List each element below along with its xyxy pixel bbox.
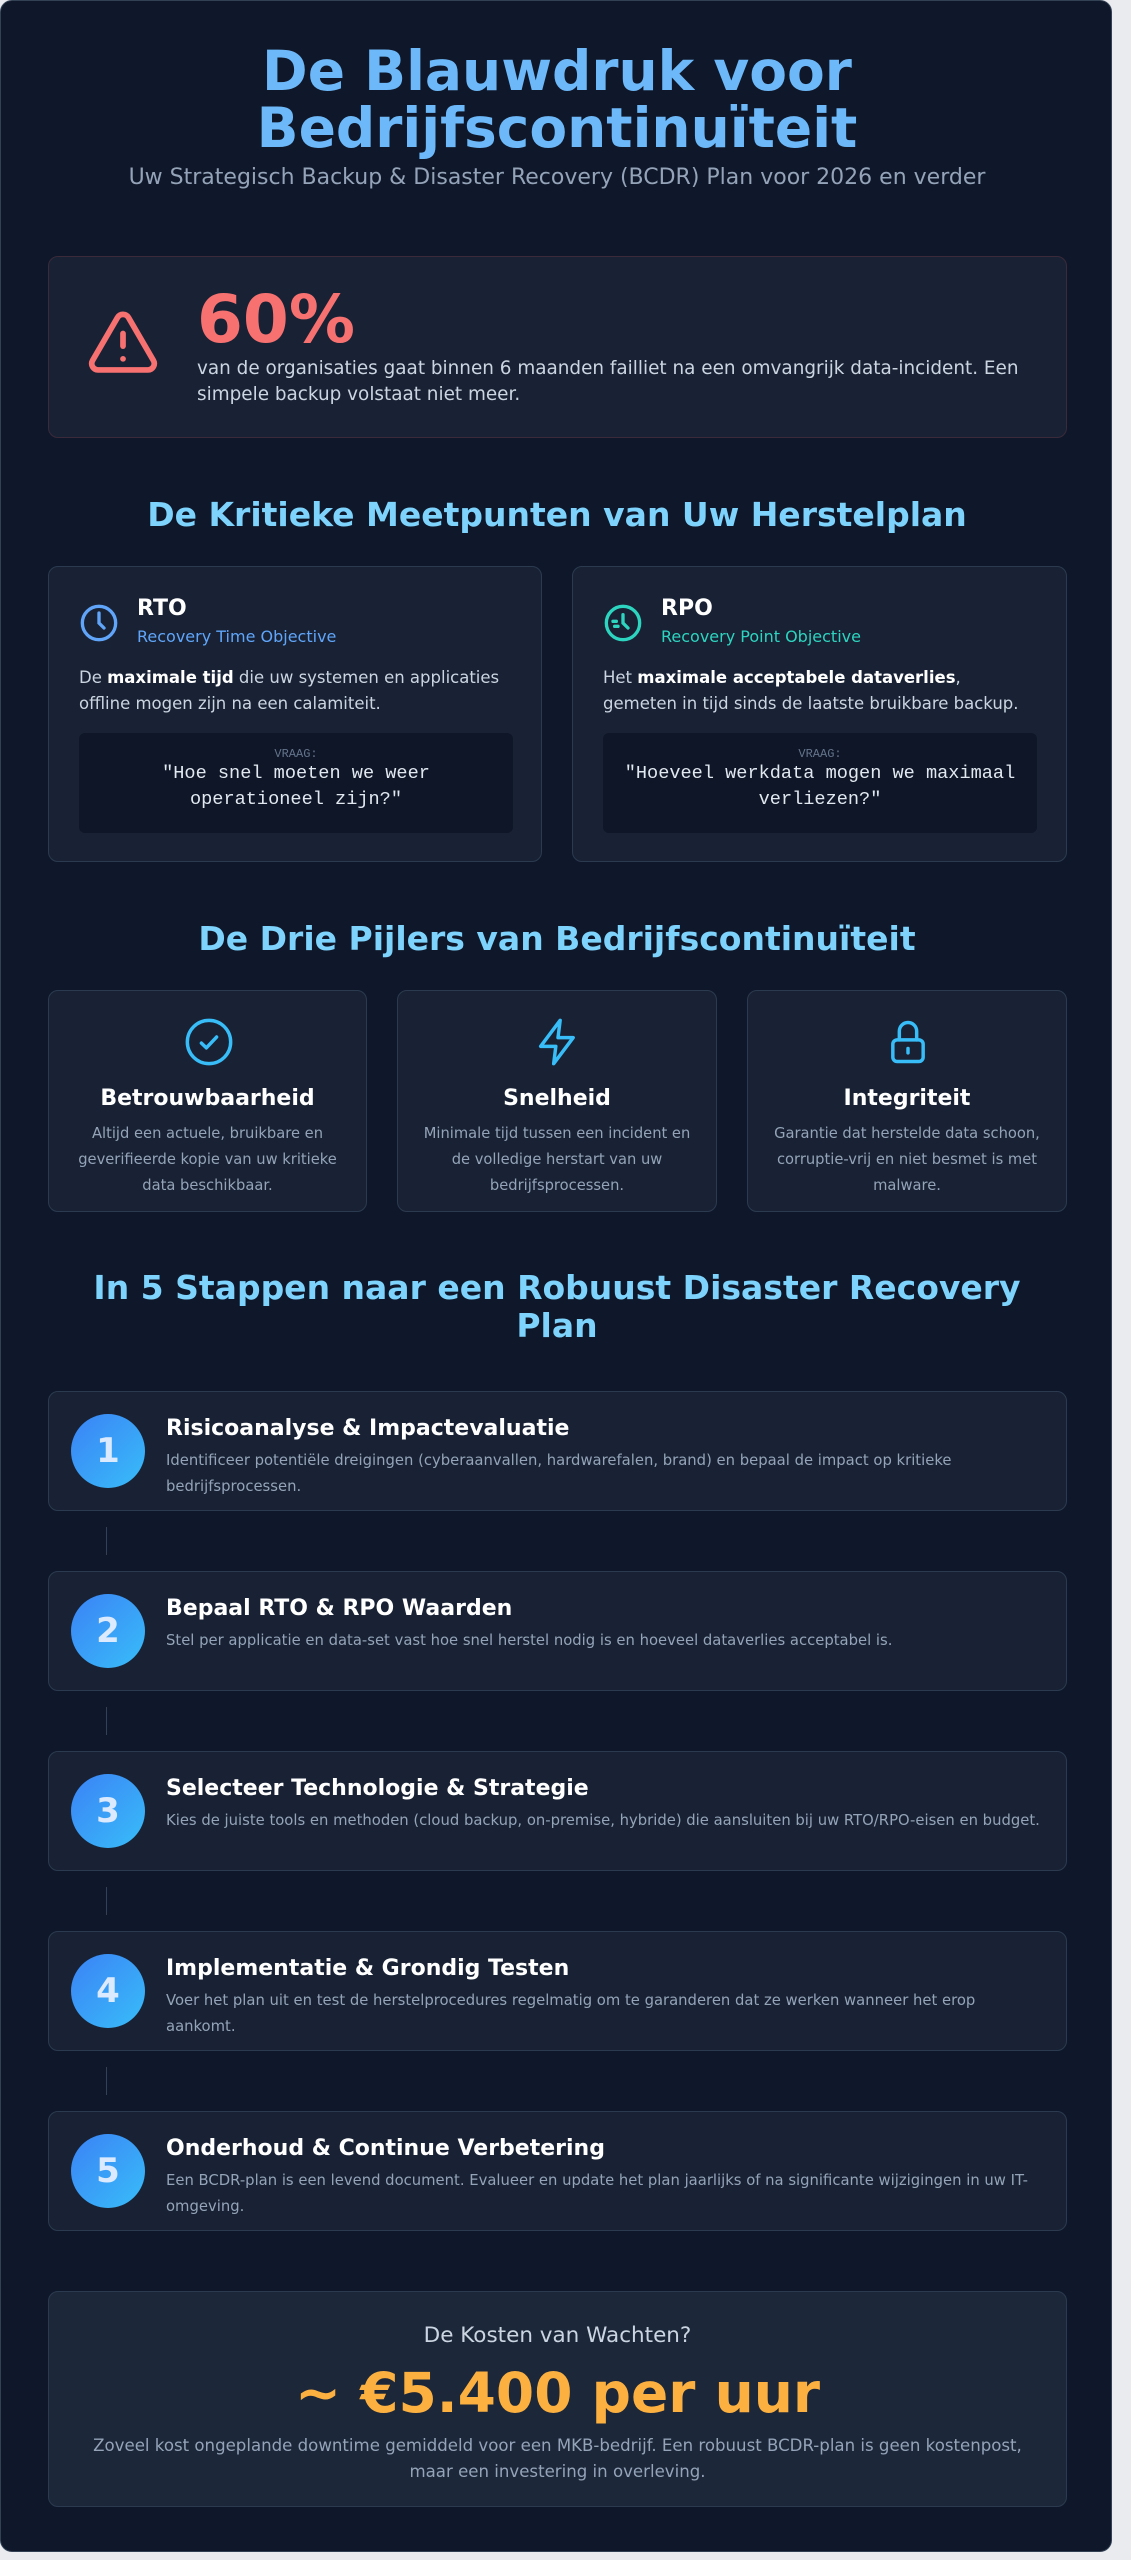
step 1: Risicoanalyse & Impactevaluatie <box>166 1416 569 1441</box>
icon: clock <box>80 604 118 642</box>
cost figure: ~ €5.400 per uur <box>295 2361 820 2425</box>
panel: RPO: Recovery Point Objective <box>661 627 861 646</box>
RPO question: verliezen?" <box>759 789 881 810</box>
RPO description <box>603 668 1019 713</box>
RTO question: operationeel zijn?" <box>190 789 402 810</box>
RPO description: gemeten in tijd sinds de laatste bruikbare backup. <box>603 694 1019 713</box>
step 2: Bepaal RTO & RPO Waarden <box>166 1596 512 1621</box>
step 5: Onderhoud & Continue Verbetering <box>166 2136 605 2161</box>
RPO question: VRAAG: <box>798 747 842 761</box>
icon: warning <box>88 312 158 373</box>
pillar: Betrouwbaarheid <box>48 990 367 1212</box>
icon: lightning <box>538 1018 575 1066</box>
step 2 <box>48 1571 1067 1691</box>
step 2: Stel per applicatie en data-set vast hoe snel herstel nodig is en hoeveel dataverlies acceptabel is. <box>166 1632 892 1649</box>
stat number: 60% <box>197 281 355 358</box>
RTO heading: RTO <box>137 596 187 621</box>
panel: RPO <box>572 566 1067 862</box>
RTO question: "Hoe snel moeten we weer <box>162 763 430 784</box>
heading: metrics: De Kritieke Meetpunten van Uw Herstelplan <box>147 495 967 534</box>
icon: check circle <box>186 1018 232 1066</box>
pillar: Snelheid: Minimale tijd tussen een incident en de volledige herstart van uw bedrijfsprocessen. <box>424 1125 690 1194</box>
RPO description: Het maximale acceptabele dataverlies, <box>603 668 961 687</box>
heading: pillars: De Drie Pijlers van Bedrijfscontinuïteit <box>198 919 916 958</box>
RPO heading: RPO <box>661 596 713 621</box>
step 3 <box>48 1751 1067 1871</box>
step 5: Een BCDR-plan is een levend document. Evalueer en update het plan jaarlijks of na significante wijzigingen in uw IT-omgeving. <box>166 2172 1028 2215</box>
panel: RTO: Recovery Time Objective <box>137 627 336 646</box>
step 3: Kies de juiste tools en methoden (cloud backup, on-premise, hybride) die aansluiten bij uw RTO/RPO-eisen en budget. <box>166 1812 1040 1829</box>
step 5 <box>48 2111 1067 2231</box>
step 3: 3 <box>96 1791 120 1831</box>
step 3: Selecteer Technologie & Strategie <box>166 1776 589 1801</box>
step 4 <box>48 1931 1067 2051</box>
panel: RTO <box>48 566 542 862</box>
step 2: 2 <box>96 1611 120 1651</box>
pillar: Betrouwbaarheid: Altijd een actuele, bruikbare en geverifieerde kopie van uw kritieke data beschikbaar. <box>78 1125 337 1194</box>
step 4: 4 <box>96 1971 120 2011</box>
title: De Blauwdruk voor <box>262 39 852 103</box>
pillar: Integriteit: Integriteit <box>844 1086 970 1111</box>
icon: history clock <box>604 604 642 642</box>
step 4: aankomt. <box>166 2018 236 2035</box>
pillar: Snelheid: Snelheid <box>503 1086 611 1111</box>
icon: lock <box>891 1020 925 1064</box>
step 1 <box>48 1391 1067 1511</box>
step 1: Identificeer potentiële dreigingen (cyberaanvallen, hardwarefalen, brand) en bepaal de impact op kritieke bedrijfsprocessen. <box>166 1452 951 1495</box>
step 5: 5 <box>96 2151 120 2191</box>
RTO question <box>79 733 513 833</box>
panel: cost of waiting <box>48 2291 1067 2507</box>
RTO question: VRAAG: <box>274 747 318 761</box>
stat panel <box>48 256 1067 438</box>
pillar: Snelheid <box>397 990 717 1212</box>
RTO description: De maximale tijd die uw systemen en applicaties offline mogen zijn na een calamiteit. <box>79 668 499 713</box>
step 1: 1 <box>96 1431 120 1471</box>
title <box>257 39 857 160</box>
cost heading: De Kosten van Wachten? <box>424 2323 691 2348</box>
cost text: Zoveel kost ongeplande downtime gemiddeld voor een MKB-bedrijf. Een robuust BCDR-plan is geen kostenpost, maar een investering in overleving. <box>93 2436 1022 2481</box>
RPO question <box>603 733 1037 833</box>
pillar: Betrouwbaarheid: Betrouwbaarheid <box>100 1086 315 1111</box>
stat text: van de organisaties gaat binnen 6 maanden failliet na een omvangrijk data-incident. Een simpele backup volstaat niet meer. <box>197 358 1018 405</box>
subtitle: Uw Strategisch Backup & Disaster Recovery (BCDR) Plan voor 2026 en verder <box>129 165 985 190</box>
title: Bedrijfscontinuïteit <box>257 96 857 160</box>
pillar: Integriteit: Garantie dat herstelde data schoon, corruptie-vrij en niet besmet is met malware. <box>774 1125 1040 1194</box>
heading: steps: In 5 Stappen naar een Robuust Disaster Recovery Plan <box>93 1268 1021 1345</box>
step 4: Voer het plan uit en test de herstelprocedures regelmatig om te garanderen dat ze werken wanneer het erop <box>166 1992 975 2009</box>
pillar: Integriteit <box>747 990 1067 1212</box>
RPO question: "Hoeveel werkdata mogen we maximaal <box>625 763 1015 784</box>
step 4: Implementatie & Grondig Testen <box>166 1956 569 1981</box>
